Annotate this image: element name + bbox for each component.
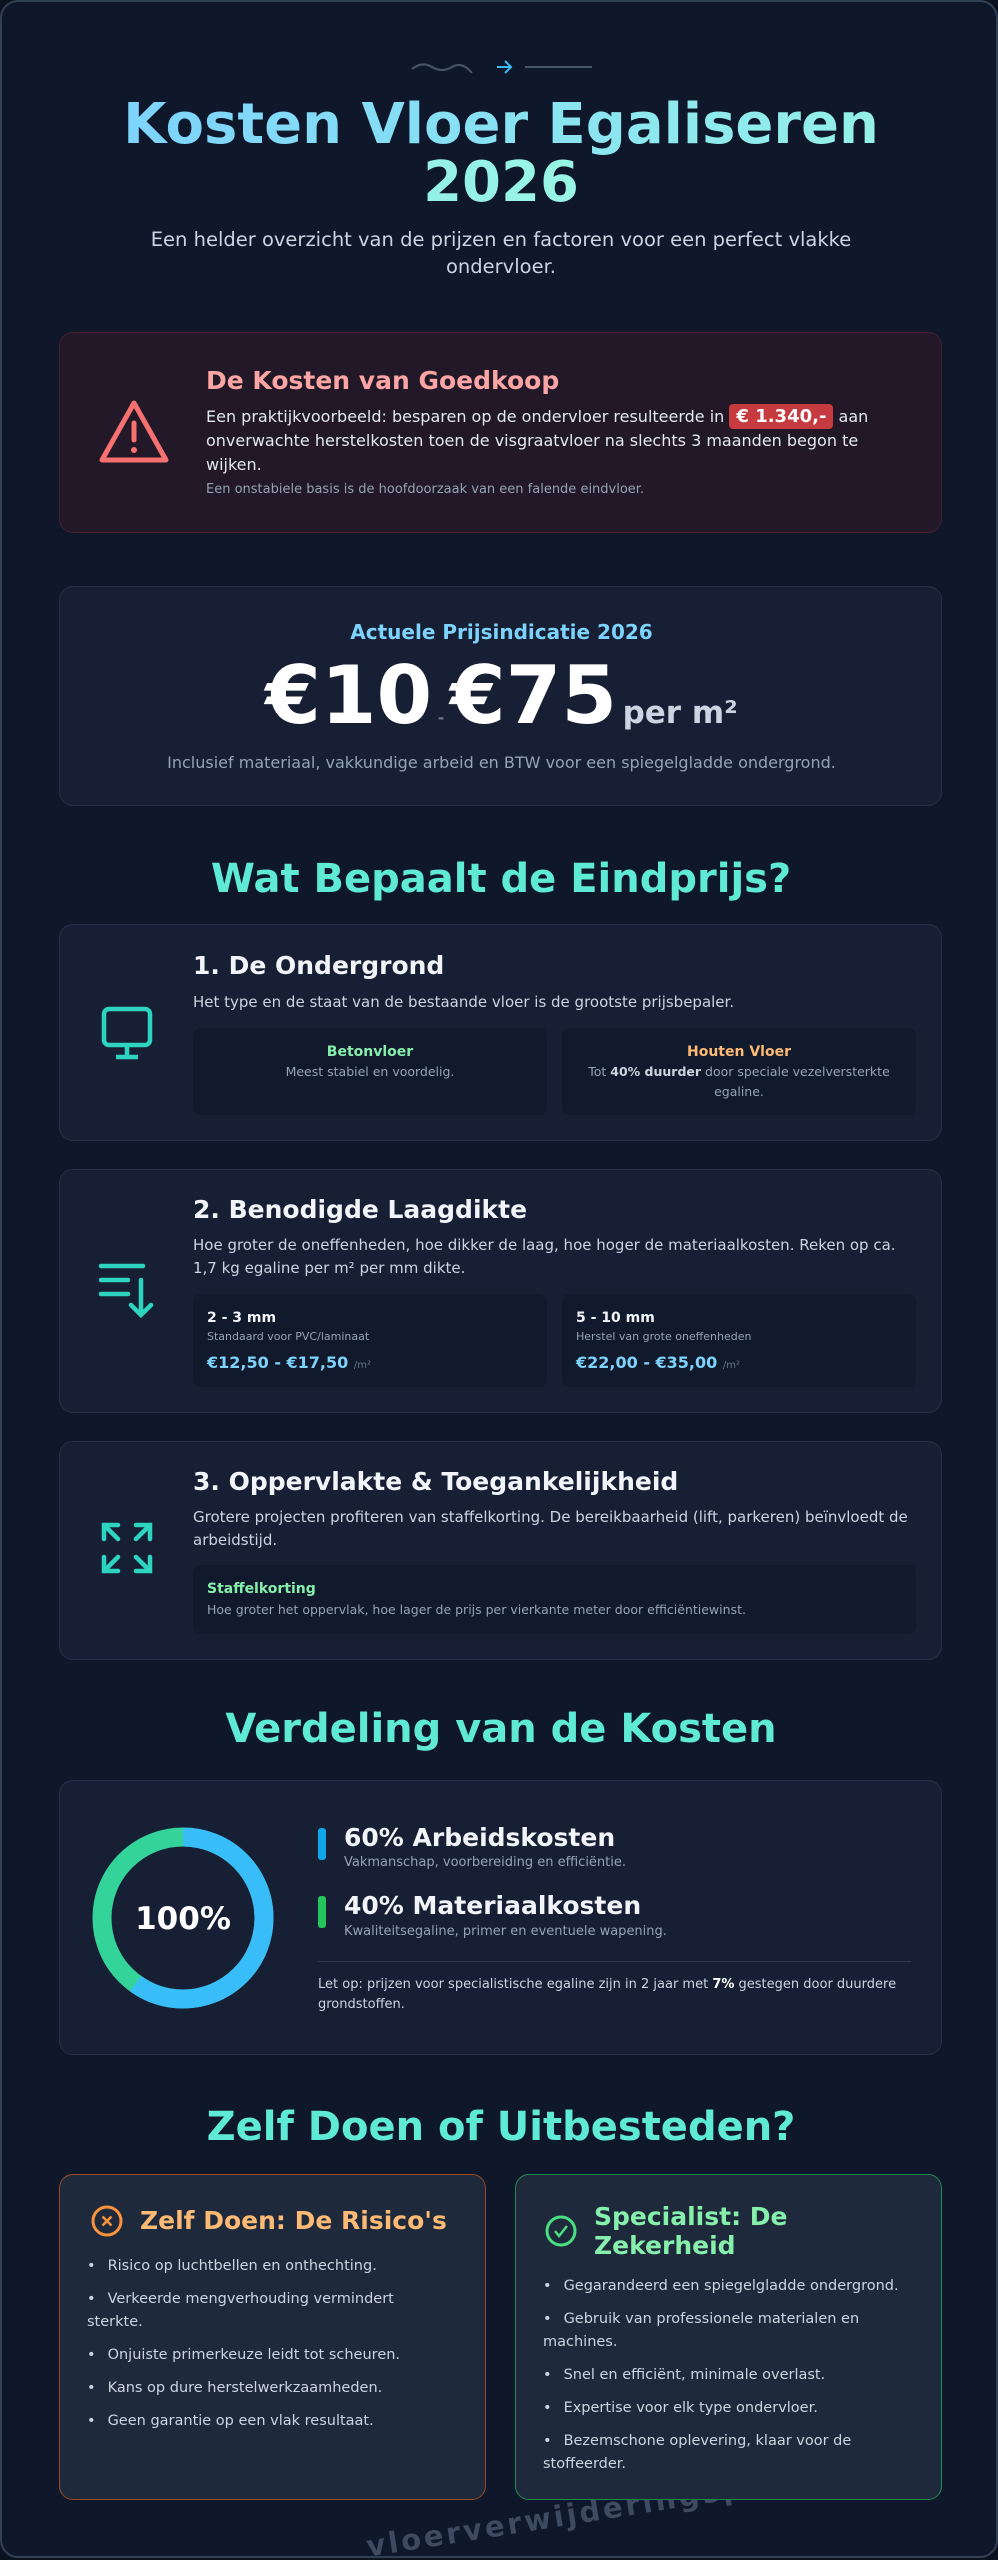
- sub: 5-10 mm: €22,00 - €35,00 /m²: [576, 1353, 740, 1372]
- panel: specialist: [515, 2174, 942, 2500]
- list: Expertise voor elk type ondervloer.: [564, 2400, 818, 2416]
- donut chart: [92, 1828, 274, 2008]
- sub: beton: Betonvloer: [327, 1044, 413, 1060]
- panel: oppervlakte: [59, 1441, 942, 1660]
- heading: 3. Oppervlakte & Toegankelijkheid: [193, 1467, 678, 1496]
- title: 2026: [423, 150, 579, 215]
- list: Risico op luchtbellen en onthechting.: [108, 2258, 377, 2274]
- heading: De Kosten van Goedkoop: [206, 366, 559, 395]
- heading: 2. Benodigde Laagdikte: [193, 1195, 527, 1224]
- note: Inclusief materiaal, vakkundige arbeid en BTW voor een spiegelgladde ondergrond.: [167, 753, 836, 772]
- legend: materiaal: 40% Materiaalkosten: [344, 1891, 641, 1920]
- sub: staffelkorting: [193, 1565, 916, 1634]
- sub: 5-10 mm: [562, 1294, 916, 1387]
- note: Let op: prijzen voor specialistische egaline zijn in 2 jaar met 7% gestegen door duurdere grondstoffen.: [318, 1977, 896, 2012]
- panel: zelf doen: [59, 2174, 486, 2500]
- list: Kans op dure herstelwerkzaamheden.: [108, 2380, 382, 2396]
- sub: staffelkorting: Staffelkorting: [207, 1581, 316, 1597]
- sub: staffelkorting: Hoe groter het oppervlak, hoe lager de prijs per vierkante meter door efficiëntiewinst.: [207, 1602, 746, 1617]
- note: Een onstabiele basis is de hoofdoorzaak van een falende eindvloer.: [206, 482, 644, 497]
- panel: prijsindicatie: [59, 586, 942, 806]
- sub: 2-3 mm: €12,50 - €17,50 /m²: [207, 1353, 371, 1372]
- list: Geen garantie op een vlak resultaat.: [108, 2413, 374, 2429]
- sub: 5-10 mm: Herstel van grote oneffenheden: [576, 1330, 751, 1343]
- icon: warning: [100, 400, 168, 462]
- panel: verdeling: [59, 1780, 942, 2055]
- sub: 2-3 mm: [193, 1294, 547, 1387]
- sub: hout: [562, 1028, 916, 1115]
- heading: zelf doen: Zelf Doen of Uitbesteden?: [207, 2104, 795, 2150]
- icon: check circle: [546, 2216, 576, 2246]
- body text: Een praktijkvoorbeeld: besparen op de ondervloer resulteerde in € 1.340,- aan onverwachte herstelkosten toen de visgraatvloer na slechts 3 maanden begon te wijken.: [206, 406, 868, 474]
- title: [123, 92, 879, 215]
- icon: x circle: [92, 2206, 122, 2236]
- list: Onjuiste primerkeuze leidt tot scheuren.: [108, 2347, 400, 2363]
- sub: hout: Tot 40% duurder door speciale vezelversterkte egaline.: [588, 1064, 890, 1099]
- sub: beton: Meest stabiel en voordelig.: [286, 1064, 454, 1079]
- list: Verkeerde mengverhouding vermindert sterkte.: [87, 2291, 394, 2330]
- legend: materiaal: [318, 1891, 667, 1939]
- donut chart: 100%: [135, 1901, 231, 1937]
- legend: arbeid: Vakmanschap, voorbereiding en efficiëntie.: [344, 1855, 626, 1870]
- sub: 5-10 mm: 5 - 10 mm: [576, 1310, 655, 1326]
- desc: Hoe groter de oneffenheden, hoe dikker de laag, hoe hoger de materiaalkosten. Reken op ca. 1,7 kg egaline per m² per mm dikte.: [193, 1236, 896, 1277]
- sub: hout: Houten Vloer: [687, 1044, 791, 1060]
- icon: expand arrows: [102, 1522, 152, 1574]
- list: [543, 2278, 899, 2472]
- heading: Specialist: De Zekerheid: [594, 2202, 788, 2260]
- desc: Grotere projecten profiteren van staffelkorting. De bereikbaarheid (lift, parkeren) beïnvloedt de arbeidstijd.: [193, 1508, 908, 1549]
- decorative header line: [412, 60, 592, 74]
- big price: €10 - €75 per m²: [265, 649, 738, 742]
- icon: layers down: [98, 1264, 154, 1318]
- sub: beton: [193, 1028, 547, 1115]
- legend: arbeid: 60% Arbeidskosten: [344, 1823, 615, 1852]
- heading: Zelf Doen: De Risico's: [140, 2206, 447, 2235]
- heading: wat bepaalt: Wat Bepaalt de Eindprijs?: [211, 856, 791, 902]
- heading: verdeling: Verdeling van de Kosten: [225, 1706, 777, 1752]
- list: Snel en efficiënt, minimale overlast.: [564, 2367, 825, 2383]
- list: Gegarandeerd een spiegelgladde ondergrond.: [564, 2278, 899, 2294]
- heading: 1. De Ondergrond: [193, 951, 444, 980]
- subtitle: Een helder overzicht van de prijzen en factoren voor een perfect vlakke ondervloer.: [151, 228, 851, 278]
- icon: monitor: [102, 1006, 152, 1060]
- title: Kosten Vloer Egaliseren: [123, 92, 879, 157]
- list: Bezemschone oplevering, klaar voor de stoffeerder.: [543, 2433, 851, 2472]
- sub: 2-3 mm: Standaard voor PVC/laminaat: [207, 1330, 369, 1343]
- panel: laagdikte: [59, 1169, 942, 1413]
- panel: kosten van goedkoop: [59, 332, 942, 533]
- legend: materiaal: Kwaliteitsegaline, primer en eventuele wapening.: [344, 1924, 667, 1939]
- desc: Het type en de staat van de bestaande vloer is de grootste prijsbepaler.: [193, 993, 734, 1011]
- sub: 2-3 mm: 2 - 3 mm: [207, 1310, 276, 1326]
- list: Gebruik van professionele materialen en machines.: [543, 2311, 859, 2350]
- legend: arbeid: [318, 1823, 626, 1870]
- list: [87, 2258, 400, 2429]
- panel: ondergrond: [59, 924, 942, 1141]
- label: Actuele Prijsindicatie 2026: [350, 620, 653, 644]
